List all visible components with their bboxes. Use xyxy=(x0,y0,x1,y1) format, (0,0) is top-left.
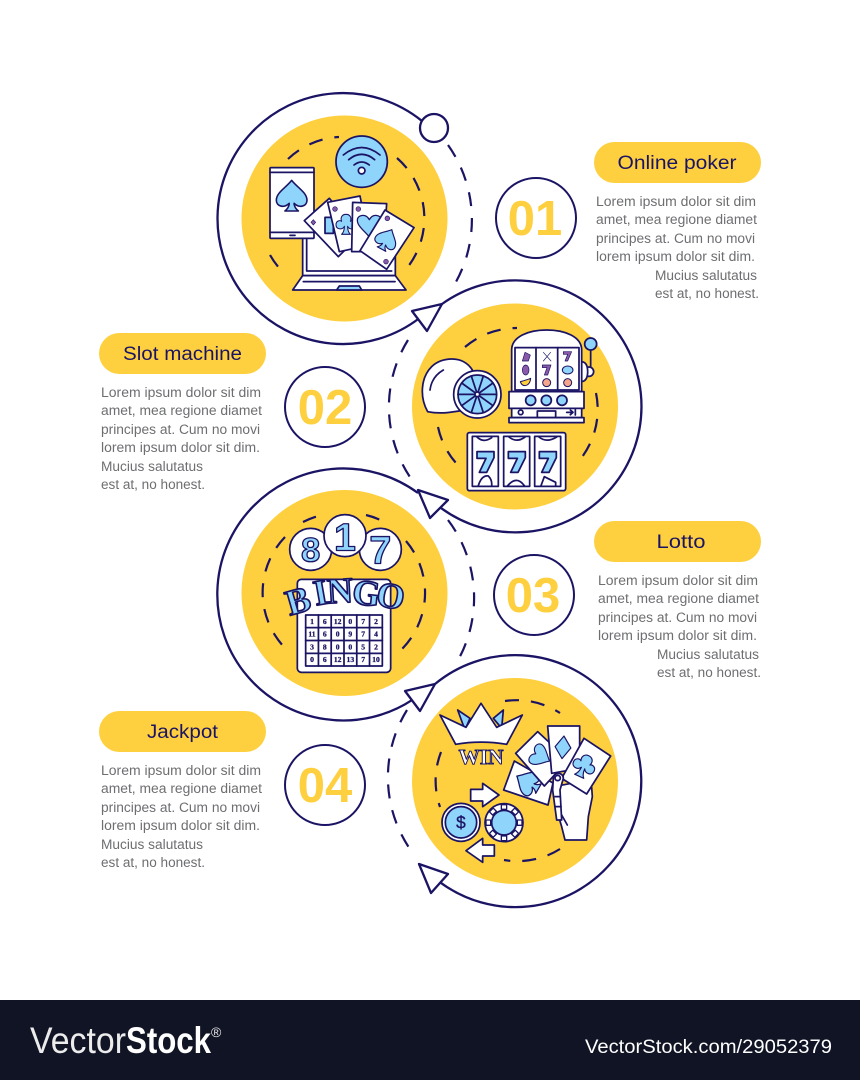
text block 1 xyxy=(596,194,759,301)
icon: lottery balls xyxy=(290,515,401,572)
icon: win crown xyxy=(440,703,522,769)
flow ring 3 xyxy=(217,468,418,720)
footer url: VectorStock.com/29052379 xyxy=(585,1037,832,1058)
panel: yellow disc 4 xyxy=(412,678,618,884)
icon: slot cabinet xyxy=(509,330,597,423)
icon: bingo card: 10 xyxy=(372,655,380,664)
text block 1: principes at. Cum no movi xyxy=(596,231,755,246)
icon: bingo card: 0 xyxy=(348,617,352,626)
icon: bingo card: 2 xyxy=(374,642,378,651)
heading: Slot machine xyxy=(99,333,266,374)
icon: bingo card: 12 xyxy=(334,655,342,664)
text block 2: est at, no honest. xyxy=(101,477,205,492)
flow ring 1 xyxy=(218,93,422,344)
dashed connector 2 xyxy=(389,340,412,480)
icon: laptop xyxy=(293,232,406,290)
number badge 03 xyxy=(494,555,574,635)
text block 4: est at, no honest. xyxy=(101,855,205,870)
text block 1: Mucius salutatus xyxy=(655,268,757,283)
heading: Slot machine: Slot machine xyxy=(123,344,242,365)
icon: jackpot xyxy=(440,703,611,862)
footer logo: Stock xyxy=(126,1020,211,1061)
icon: bingo card: 0 xyxy=(336,630,340,639)
icon: bingo card: 9 xyxy=(348,630,352,639)
text block 2: Lorem ipsum dolor sit dim xyxy=(101,385,261,400)
arrow 1 xyxy=(412,304,442,331)
inner dashed ring 4 xyxy=(436,700,560,861)
text block 4: Mucius salutatus xyxy=(101,837,203,852)
dashed connector 1 xyxy=(448,145,472,287)
arrow: exchange right xyxy=(471,783,499,807)
number badge 04 xyxy=(285,745,365,825)
text block 3: Lorem ipsum dolor sit dim xyxy=(598,573,758,588)
heading: Online poker: Online poker xyxy=(618,153,737,174)
number badge 02: 02 xyxy=(298,381,352,435)
text block 3: principes at. Cum no movi xyxy=(598,610,757,625)
heading: Lotto xyxy=(594,521,761,562)
text block 2: amet, mea regione diamet xyxy=(101,403,262,418)
inner dashed ring 1 xyxy=(270,137,424,274)
icon: win crown: WIN xyxy=(458,745,504,769)
icon: coin: $ xyxy=(456,812,466,832)
text block 3: lorem ipsum dolor sit dim. xyxy=(598,628,757,643)
icon: lottery balls: 8 xyxy=(301,532,320,570)
footer logo: Vector xyxy=(30,1020,126,1061)
text block 1: Lorem ipsum dolor sit dim xyxy=(596,194,756,209)
icon: bingo card: 6 xyxy=(323,630,327,639)
text block 2: Mucius salutatus xyxy=(101,459,203,474)
icon: bingo card: 0 xyxy=(348,642,352,651)
icon: bingo lettering: N xyxy=(326,570,354,611)
icon: bingo lettering: B xyxy=(281,578,315,623)
icon: bingo card: 6 xyxy=(323,617,327,626)
icon: lottery balls: 1 xyxy=(334,515,356,559)
icon: slot machine xyxy=(422,330,597,491)
text block 4: amet, mea regione diamet xyxy=(101,781,262,796)
arrow 3 xyxy=(405,684,435,711)
icon: bingo lettering: O xyxy=(373,574,408,618)
text block 3: est at, no honest. xyxy=(657,665,761,680)
text block 2: lorem ipsum dolor sit dim. xyxy=(101,440,260,455)
icon: bingo lettering: G xyxy=(351,572,383,614)
icon: tablet with spade xyxy=(270,168,314,238)
icon: bingo xyxy=(281,515,408,672)
icon: triple seven reels xyxy=(467,433,566,491)
icon: bingo card: 13 xyxy=(347,655,354,664)
icon: bingo card: 2 xyxy=(374,617,378,626)
icon: bingo card: 7 xyxy=(361,630,365,639)
icon: bingo lettering xyxy=(281,570,408,623)
inner dashed ring 2 xyxy=(438,328,598,463)
arrow 2 xyxy=(418,490,448,518)
icon: wifi xyxy=(336,136,387,187)
text block 1: est at, no honest. xyxy=(655,286,759,301)
text block 4: lorem ipsum dolor sit dim. xyxy=(101,818,260,833)
number badge 03: 03 xyxy=(506,569,560,623)
text block 2: principes at. Cum no movi xyxy=(101,422,260,437)
icon: bingo card: 12 xyxy=(334,617,342,626)
arrow 4 xyxy=(419,864,448,893)
panel: yellow disc 3 xyxy=(242,490,448,696)
start node circle xyxy=(420,114,448,142)
flow ring 2 xyxy=(440,280,641,532)
icon: lottery balls: 7 xyxy=(369,528,391,572)
footer bar xyxy=(0,1000,860,1080)
text block 4: principes at. Cum no movi xyxy=(101,800,260,815)
text block 2 xyxy=(101,385,262,492)
number badge 01 xyxy=(496,178,576,258)
text block 3: Mucius salutatus xyxy=(657,647,759,662)
arrow: exchange left xyxy=(466,838,494,862)
heading: Jackpot xyxy=(99,711,266,752)
panel: yellow disc 2 xyxy=(412,304,618,510)
dashed connector 3 xyxy=(448,520,474,662)
icon: bingo card: 4 xyxy=(374,630,378,639)
heading: Jackpot: Jackpot xyxy=(147,722,219,743)
icon: bingo card: 6 xyxy=(323,655,327,664)
number badge 04: 04 xyxy=(298,759,352,813)
icon: bingo card: 11 xyxy=(308,630,316,639)
icon: coin xyxy=(442,803,480,841)
text block 1: lorem ipsum dolor sit dim. xyxy=(596,249,755,264)
icon: casino chip xyxy=(485,804,523,842)
number badge 02 xyxy=(285,367,365,447)
icon: bingo card xyxy=(297,579,391,672)
text block 3: amet, mea regione diamet xyxy=(598,591,759,606)
text block 1: amet, mea regione diamet xyxy=(596,212,757,227)
icon: bingo card: 7 xyxy=(361,655,365,664)
number badge 01: 01 xyxy=(508,192,562,246)
icon: lemon with slice xyxy=(422,359,501,418)
icon: hand holding cards xyxy=(504,726,611,840)
icon: bingo card: 3 xyxy=(310,642,314,651)
heading: Online poker xyxy=(594,142,761,183)
inner dashed ring 3 xyxy=(263,514,425,650)
dashed connector 4 xyxy=(388,710,412,852)
icon: bingo lettering: I xyxy=(310,572,331,613)
footer logo: ® xyxy=(211,1024,222,1040)
panel: yellow disc 1 xyxy=(242,116,448,322)
text block 3 xyxy=(598,573,761,680)
text block 4 xyxy=(101,763,262,870)
icon: bingo card: 5 xyxy=(361,642,365,651)
icon: bingo card: 7 xyxy=(361,617,365,626)
icon: fan of cards xyxy=(304,196,414,269)
icon: bingo card: 8 xyxy=(323,642,327,651)
icon: bingo card: 1 xyxy=(310,617,314,626)
icon: online poker xyxy=(270,136,414,290)
text block 4: Lorem ipsum dolor sit dim xyxy=(101,763,261,778)
footer logo xyxy=(30,1020,222,1061)
icon: bingo card: 0 xyxy=(336,642,340,651)
icon: bingo card: 0 xyxy=(310,655,314,664)
heading: Lotto: Lotto xyxy=(656,532,706,553)
flow ring 4 xyxy=(435,655,641,907)
